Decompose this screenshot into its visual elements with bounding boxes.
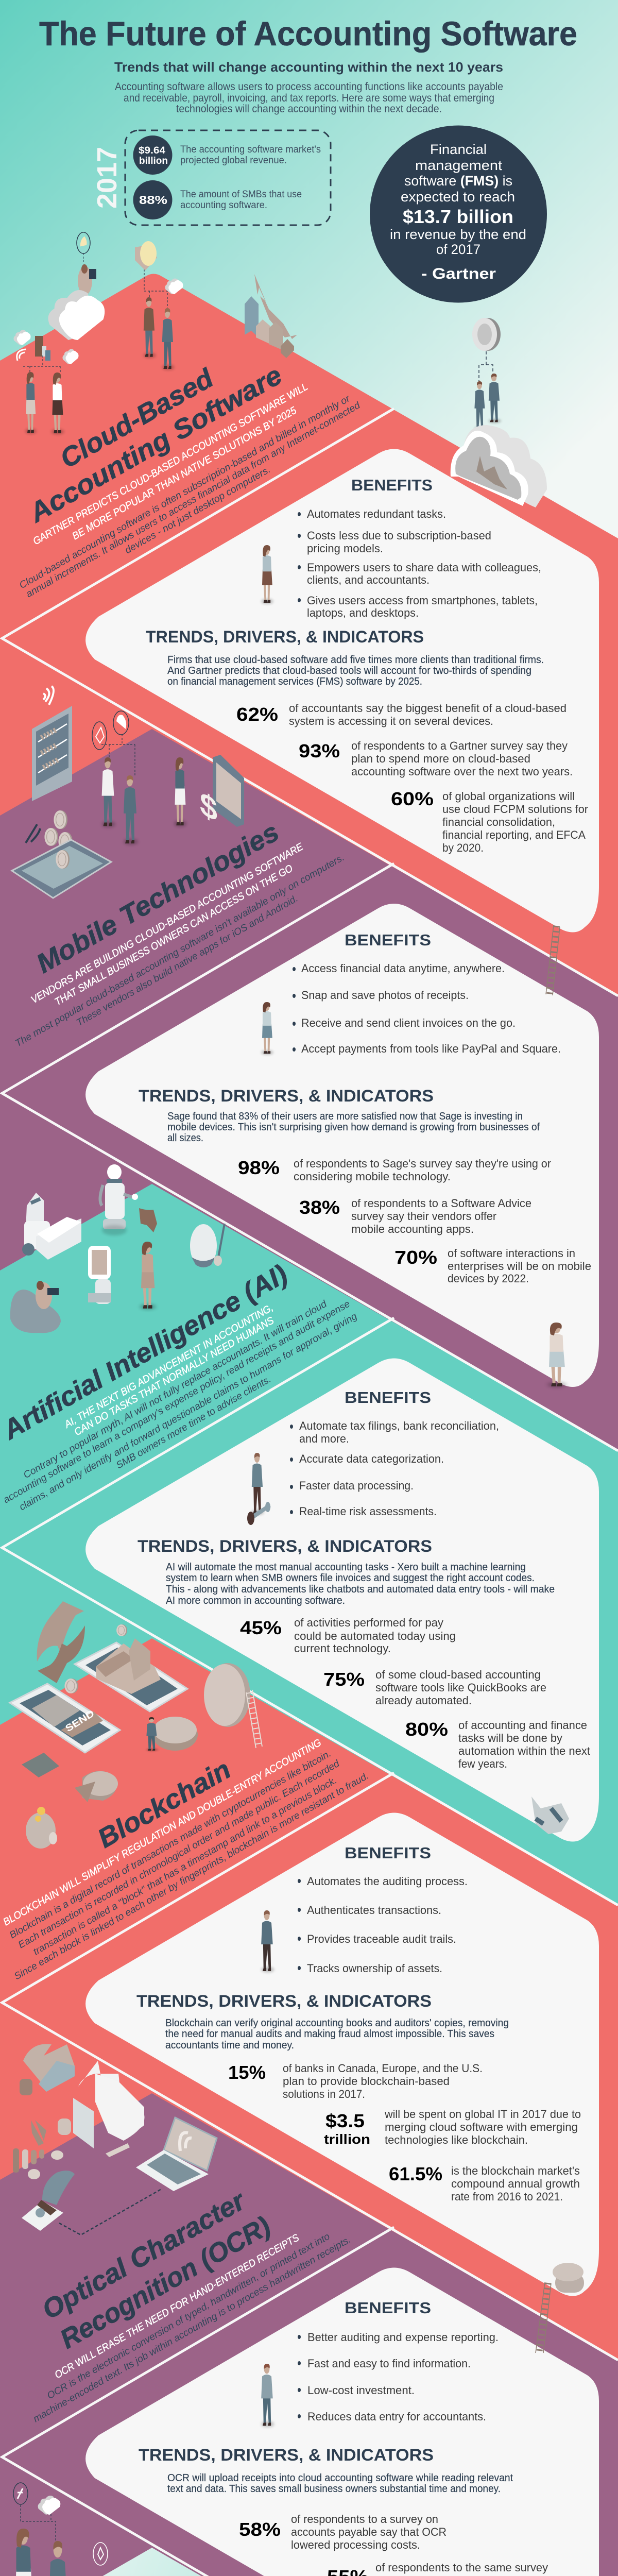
- benefits list: clients, and accountants.: [307, 573, 430, 586]
- heading: benefits: BENEFITS: [351, 476, 433, 494]
- Gartner callout circle: expected to reach: [401, 189, 515, 205]
- stat: 70%: [394, 1247, 591, 1285]
- stat: 98%: [238, 1157, 551, 1183]
- stat: 60%: 60%: [391, 788, 434, 809]
- trends paragraph: accountants time and money.: [165, 2040, 294, 2051]
- benefits list: [293, 962, 561, 1055]
- title: The Future of Accounting Software: [39, 14, 577, 53]
- stat: 61.5%: 61.5%: [389, 2163, 442, 2184]
- section summary: claims, and only identify and forward questionable claims to humans for approval, giving: [18, 1311, 359, 1513]
- stat: 58%: of respondents to a survey on: [291, 2513, 438, 2526]
- stat: 15%: [228, 2062, 483, 2100]
- heading: benefits: BENEFITS: [345, 931, 431, 949]
- Gartner callout circle: in revenue by the end: [390, 227, 526, 242]
- stat: 38%: survey say their vendors offer: [351, 1210, 496, 1223]
- Gartner callout circle: management: [415, 158, 503, 173]
- panel: benefits and trends: [13, 2268, 599, 2576]
- panel: benefits and trends: [85, 904, 599, 1387]
- illustration: two women with wifi and clouds: [13, 330, 79, 434]
- stat: 70%: 70%: [394, 1247, 437, 1268]
- stat: 61.5%: compound annual growth: [451, 2177, 580, 2190]
- section summary: The most popular cloud-based accounting software isn't available only on computers.: [13, 852, 347, 1049]
- illustration: receipts and calculator: [73, 2061, 144, 2148]
- panel: benefits and trends: [85, 1323, 599, 1842]
- section summary: SMB owners more time to advise clients.: [114, 1374, 273, 1471]
- benefits list: Costs less due to subscription-based: [307, 529, 491, 542]
- benefits list: [290, 1419, 499, 1518]
- stat: 55%: of respondents to the same survey: [375, 2561, 548, 2574]
- section summary: These vendors also build native apps for iOS and Android.: [75, 893, 300, 1028]
- illustration: cleaning robot: [190, 1224, 225, 1267]
- stat: 58%: [239, 2513, 447, 2551]
- section: blockchain: [0, 1601, 618, 2576]
- benefits list: and more.: [299, 1432, 349, 1445]
- stat: 38%: 38%: [299, 1197, 340, 1218]
- illustration: handshake with percent icon: [135, 241, 175, 370]
- section summary: Cloud-based accounting software is often subscription-based and billed in monthly or: [18, 393, 352, 591]
- trends paragraph: Blockchain can verify original accounting books and auditors' copies, removing: [165, 2018, 509, 2029]
- stat: 15%: solutions in 2017.: [283, 2088, 365, 2100]
- illustration: TV robot: [88, 1246, 111, 1304]
- section summary: devices - not just desktop computers.: [123, 464, 272, 556]
- stats box 2017: 2017: [92, 147, 123, 209]
- band: closing gradient section: [0, 2548, 618, 2576]
- trends paragraph: Firms that use cloud-based software add five times more clients than traditional firms.: [167, 654, 544, 666]
- trends paragraph: This - along with advancements like chatbots and automated data entry tools - will make: [166, 1584, 555, 1595]
- illustration: man on beanbag: [10, 1281, 61, 1333]
- illustration: dollar phone: [200, 755, 244, 829]
- stat: 15%: 15%: [228, 2062, 266, 2083]
- stat: 60%: by 2020.: [442, 841, 484, 854]
- stat: 93%: of respondents to a Gartner survey say they: [351, 739, 568, 752]
- section summary: GARTNER PREDICTS CLOUD-BASED ACCOUNTING SOFTWARE WILL: [31, 381, 310, 547]
- stat: 80%: automation within the next: [458, 1744, 590, 1757]
- intro text: Accounting software allows users to process accounting functions like accounts payable: [115, 81, 503, 93]
- trends paragraph: Sage found that 83% of their users are more satisfied now that Sage is investing in: [167, 1111, 523, 1122]
- stat: 80%: of accounting and finance: [458, 1719, 587, 1732]
- illustration: woman with tablet: [261, 1002, 273, 1055]
- stat: 75%: software tools like QuickBooks are: [375, 1681, 546, 1694]
- illustration: phone with money stacks: [75, 1638, 187, 1711]
- Gartner callout circle: of 2017: [436, 242, 480, 257]
- illustration: coin above two men on cloud: [451, 318, 547, 507]
- stat: 45%: current technology.: [294, 1642, 391, 1655]
- illustration: abacus tablet: [32, 686, 72, 801]
- stat: 80%: 80%: [405, 1719, 448, 1740]
- illustration: woman with phone: [547, 1323, 566, 1387]
- trends paragraph: all sizes.: [167, 1132, 203, 1144]
- benefits list: Low-cost investment.: [307, 2384, 415, 2397]
- section summary: Contrary to popular myth, AI will not fully replace accountants. It will train cloud: [22, 1298, 329, 1481]
- section summary: machine-encoded text. Its job within accounting is to process handwritten receipts.: [31, 2234, 353, 2425]
- illustration: ladder: [536, 2282, 551, 2353]
- illustration: man on hoverboard: [247, 1453, 271, 1525]
- illustration: colleagues on gradient floor: [14, 2529, 215, 2576]
- stats box 2017: billion: [139, 156, 168, 166]
- section summary: Blockchain is a digital record of transactions made with cryptocurrencies like bitcoin.: [8, 1748, 333, 1941]
- stats box 2017: accounting software.: [180, 200, 267, 211]
- band: AI section colour: [0, 1184, 618, 2576]
- stat: 55%: [327, 2561, 550, 2576]
- stat: 45%: [240, 1616, 456, 1655]
- section summary: THAT SMALL BUSINESS OWNERS CAN ACCESS ON THE GO: [53, 862, 295, 1008]
- heading: benefits: BENEFITS: [345, 1388, 431, 1406]
- stat: 93%: [299, 739, 573, 778]
- illustration: three colleagues: [102, 757, 186, 844]
- trends paragraph: AI more common in accounting software.: [166, 1595, 345, 1606]
- stat: 38%: of respondents to a Software Advice: [351, 1197, 531, 1210]
- benefits list: Accurate data categorization.: [299, 1452, 444, 1465]
- trends paragraph: the need for manual audits and making fraud almost impossible. This saves: [165, 2028, 494, 2040]
- band: blockchain section colour: [0, 1638, 618, 2576]
- stats box 2017: projected global revenue.: [180, 155, 287, 166]
- section summary: CAN DO TASKS THAT NORMALLY NEED HUMANS: [73, 1315, 276, 1438]
- trends paragraph: [167, 654, 544, 687]
- heading: benefits: BENEFITS: [345, 2299, 431, 2317]
- section heading: Accounting Software: [23, 360, 287, 529]
- trends paragraph: mobile devices. This isn't surprising given how demand is growing from businesses of: [167, 1122, 540, 1133]
- stats box 2017: $9.64: [139, 145, 165, 156]
- stat: 58%: lowered processing costs.: [291, 2538, 420, 2551]
- section summary: AI, THE NEXT BIG ADVANCEMENT IN ACCOUNTING,: [62, 1302, 275, 1431]
- heading: trends: TRENDS, DRIVERS, & INDICATORS: [146, 628, 424, 646]
- illustration: stamp on documents: [22, 2171, 75, 2231]
- heading: trends: TRENDS, DRIVERS, & INDICATORS: [136, 1992, 432, 2010]
- section summary: accounting software to learn a company's expense policy, read receipts and audit expense: [2, 1298, 352, 1505]
- stat: 38%: [299, 1197, 531, 1235]
- heading: benefits: BENEFITS: [345, 1844, 431, 1862]
- stat: 98%: considering mobile technology.: [294, 1170, 451, 1183]
- trends paragraph: [167, 2472, 513, 2495]
- stat: 98%: 98%: [238, 1157, 280, 1178]
- stats box 2017: [92, 130, 331, 225]
- trends paragraph: system to learn when SMB owners file invoices and suggest the right account codes.: [166, 1572, 535, 1584]
- trends paragraph: AI will automate the most manual accounting tasks - Xero built a machine learning: [166, 1562, 526, 1573]
- trends paragraph: And Gartner predicts that cloud-based tools will account for two-thirds of spending: [167, 665, 531, 676]
- stat: 75%: [323, 1668, 546, 1707]
- stat: 58%: accounts payable say that OCR: [291, 2526, 447, 2538]
- stat: 60%: financial consolidation,: [442, 816, 555, 828]
- illustration: person resting at panel bottom: [531, 1797, 569, 1834]
- intro text: and receivable, payroll, invoicing, and tax reports. Here are some ways that emerging: [124, 92, 494, 104]
- illustration: VR woman: [140, 1242, 156, 1310]
- stat: 62%: system is accessing it on several devices.: [289, 715, 493, 727]
- section heading: Recognition (OCR): [55, 2211, 276, 2354]
- illustration: phone with send button: [10, 1684, 120, 1753]
- section summary: annual increments. It allows users to access financial data from any Internet-connected: [24, 400, 363, 600]
- benefits list: Accept payments from tools like PayPal and Square.: [301, 1042, 561, 1055]
- arrow: dashed path to laptop: [59, 2189, 162, 2235]
- section summary: BE MORE POPULAR THAN NATIVE SOLUTIONS BY 2025: [71, 404, 299, 542]
- icon: coins: [64, 1624, 127, 1693]
- illustration: ladder: [546, 925, 560, 995]
- benefits list: pricing models.: [307, 542, 383, 555]
- benefits list: Receive and send client invoices on the go.: [301, 1016, 516, 1029]
- stat: 45%: of activities performed for pay: [294, 1616, 443, 1629]
- illustration: woman with VR headset: [261, 2364, 274, 2427]
- stat: 45%: could be automated today using: [294, 1630, 456, 1642]
- benefits list: Gives users access from smartphones, tablets,: [307, 594, 538, 607]
- stat: 75%: of some cloud-based accounting: [375, 1668, 541, 1681]
- benefits list: Automate tax filings, bank reconciliation,: [299, 1419, 499, 1432]
- benefits list: Better auditing and expense reporting.: [307, 2331, 499, 2344]
- section heading: Artificial Intelligence (AI): [0, 1259, 293, 1446]
- section summary: transaction is called a "block" that has a timestamp and link to a previous block.: [31, 1775, 339, 1957]
- benefits list: [298, 507, 541, 619]
- illustration: rising bars and arrow: [245, 274, 297, 358]
- stat: 70%: enterprises will be on mobile: [448, 1260, 591, 1273]
- stat: 61.5%: [389, 2163, 580, 2203]
- subtitle: Trends that will change accounting within the next 10 years: [114, 59, 503, 75]
- panel: benefits and trends: [85, 1797, 599, 2296]
- benefits list: Fast and easy to find information.: [307, 2357, 471, 2370]
- trends paragraph: [166, 1562, 555, 1606]
- section: optical character recognition: [0, 2044, 618, 2576]
- stat: 38%: mobile accounting apps.: [351, 1223, 474, 1235]
- stat: 58%: 58%: [239, 2519, 281, 2540]
- stat: $3.5 trillion: merging cloud software with emerging: [385, 2121, 578, 2133]
- icon: small cloud: [165, 279, 183, 294]
- stat: 93%: accounting software over the next two years.: [351, 765, 573, 778]
- benefits list: Tracks ownership of assets.: [307, 1962, 442, 1975]
- intro text: technologies will change accounting within the next decade.: [176, 103, 442, 115]
- stat: 62%: 62%: [236, 704, 278, 725]
- heading: trends: TRENDS, DRIVERS, & INDICATORS: [139, 1087, 434, 1105]
- stat: 70%: devices by 2022.: [448, 1272, 529, 1285]
- Gartner callout circle: - Gartner: [421, 265, 496, 282]
- benefits list: Automates the auditing process.: [307, 1875, 468, 1888]
- stat: 60%: [391, 788, 588, 854]
- benefits list: [298, 1875, 468, 1975]
- stat: 62%: of accountants say the biggest benefit of a cloud-based: [289, 702, 566, 715]
- stat: $3.5 trillion: [324, 2108, 581, 2147]
- stat: 80%: [405, 1719, 590, 1770]
- stats box 2017: The amount of SMBs that use: [180, 189, 302, 200]
- illustration: dollar phone: $: [200, 785, 217, 829]
- Gartner callout circle: [370, 126, 547, 303]
- benefits list: Faster data processing.: [299, 1479, 414, 1492]
- stats box 2017: The accounting software market's: [180, 144, 321, 155]
- benefits list: [298, 2331, 499, 2423]
- trends paragraph: [167, 1111, 540, 1144]
- stat: 60%: use cloud FCPM solutions for: [442, 803, 588, 816]
- Gartner callout circle: Financial: [430, 142, 487, 157]
- section summary: VENDORS ARE BUILDING CLOUD-BASED ACCOUNTING SOFTWARE: [29, 841, 305, 1006]
- illustration: woman with briefcase: [261, 545, 273, 604]
- illustration: woman on cloud with balloon: [48, 232, 105, 340]
- stat: 15%: plan to provide blockchain-based: [283, 2075, 450, 2088]
- stat: 61.5%: rate from 2016 to 2021.: [451, 2190, 563, 2203]
- heading: trends: TRENDS, DRIVERS, & INDICATORS: [138, 1537, 432, 1555]
- icon: calculator: [22, 1753, 59, 1777]
- icon: pie chart: [75, 1771, 118, 1802]
- trends paragraph: [165, 2018, 509, 2051]
- heading: trends: TRENDS, DRIVERS, & INDICATORS: [139, 2446, 434, 2464]
- icons: message and cloud balloons: [92, 711, 135, 775]
- benefits list: Automates redundant tasks.: [307, 507, 446, 520]
- illustration: phone with send button: SEND: [64, 1708, 96, 1734]
- section: mobile technologies: [0, 686, 618, 2576]
- header block: [39, 14, 577, 303]
- benefits list: Reduces data entry for accountants.: [307, 2410, 486, 2423]
- stat: 15%: of banks in Canada, Europe, and the U.S.: [283, 2062, 483, 2075]
- section: cloud-based accounting software: [13, 232, 599, 933]
- section heading: Cloud-Based: [55, 363, 219, 474]
- benefits list: Provides traceable audit trails.: [307, 1933, 456, 1945]
- section heading: Mobile Technologies: [31, 817, 284, 979]
- stat: 60%: of global organizations will: [442, 790, 575, 803]
- illustration: man standing: [261, 1910, 274, 1972]
- Gartner callout circle: $13.7 billion: [403, 206, 513, 227]
- benefits list: Access financial data anytime, anywhere.: [301, 962, 505, 975]
- intro text: [115, 81, 503, 115]
- trends paragraph: text and data. This saves small business owners substantial time and money.: [167, 2483, 501, 2495]
- stat: 80%: tasks will be done by: [458, 1732, 562, 1744]
- stat: 93%: 93%: [299, 740, 340, 761]
- stat: $3.5 trillion: will be spent on global IT in 2017 due to: [384, 2108, 581, 2121]
- illustration: piggy bank: [26, 1807, 57, 1849]
- section summary: Each transaction is recorded in chronological order and made public. Each recorded: [16, 1758, 342, 1951]
- icons: coins and arrows: [13, 2119, 130, 2179]
- stat: $3.5 trillion: trillion: [324, 2131, 370, 2147]
- illustration: laptop: [136, 2117, 217, 2191]
- stat: 75%: already automated.: [375, 1694, 472, 1707]
- stat: 45%: 45%: [240, 1617, 282, 1638]
- stat: 75%: 75%: [323, 1669, 365, 1690]
- trends paragraph: OCR will upload receipts into cloud accounting software while reading relevant: [167, 2472, 513, 2484]
- illustration: coins dropping into tablet: [12, 810, 111, 898]
- icons: balloons and cloud above colleagues: [13, 2483, 108, 2565]
- section summary: Since each block is linked to each other by fingerprints, blockchain is more resistant to fraud.: [12, 1771, 371, 1982]
- section summary: OCR WILL ERASE THE NEED FOR HAND-ENTERED RECEIPTS: [53, 2232, 301, 2381]
- stat: 80%: few years.: [458, 1757, 507, 1770]
- stat: 61.5%: is the blockchain market's: [451, 2164, 580, 2177]
- stats box 2017: 88%: [139, 193, 167, 207]
- band: OCR section colour: [0, 2093, 618, 2576]
- illustration: robots: [22, 1164, 138, 1260]
- stat: 93%: plan to spend more on cloud-based: [351, 752, 530, 765]
- illustration: bitcoin coin and ladder: [204, 1663, 262, 1748]
- illustration: recycle arrows: [37, 1601, 85, 1683]
- illustration: chart and cylinder: [20, 2044, 75, 2095]
- benefits list: laptops, and desktops.: [307, 606, 419, 619]
- benefits list: Real-time risk assessments.: [299, 1505, 437, 1518]
- stat: $3.5 trillion: technologies like blockchain.: [385, 2133, 528, 2146]
- stat: 70%: of software interactions in: [448, 1247, 575, 1260]
- section: artificial intelligence: [0, 1164, 618, 2576]
- Gartner callout circle: software (FMS) is: [404, 173, 512, 189]
- section heading: Optical Character: [37, 2185, 251, 2325]
- section heading: Blockchain: [93, 1754, 236, 1854]
- stat: $3.5 trillion: $3.5: [325, 2110, 365, 2131]
- section summary: OCR is the electronic conversion of typed, handwritten, or printed text into: [45, 2231, 332, 2401]
- trends paragraph: on financial management services (FMS) software by 2025.: [167, 676, 422, 687]
- benefits list: Snap and save photos of receipts.: [301, 989, 469, 1002]
- stat: 62%: [236, 702, 566, 727]
- illustration: man seated on coin: [146, 1717, 198, 1751]
- benefits list: Authenticates transactions.: [307, 1904, 441, 1917]
- illustration: dog: [139, 1208, 157, 1232]
- stat: 98%: of respondents to Sage's survey say they're using or: [294, 1157, 551, 1170]
- band: mobile section colour: [0, 729, 618, 2576]
- icon: coin stack: [553, 2263, 584, 2293]
- stat: 60%: financial reporting, and EFCA: [442, 828, 586, 841]
- section summary: BLOCKCHAIN WILL SIMPLIFY REGULATION AND DOUBLE-ENTRY ACCOUNTING: [2, 1737, 323, 1928]
- panel: benefits and trends: [85, 449, 599, 933]
- benefits list: Empowers users to share data with colleagues,: [307, 561, 541, 574]
